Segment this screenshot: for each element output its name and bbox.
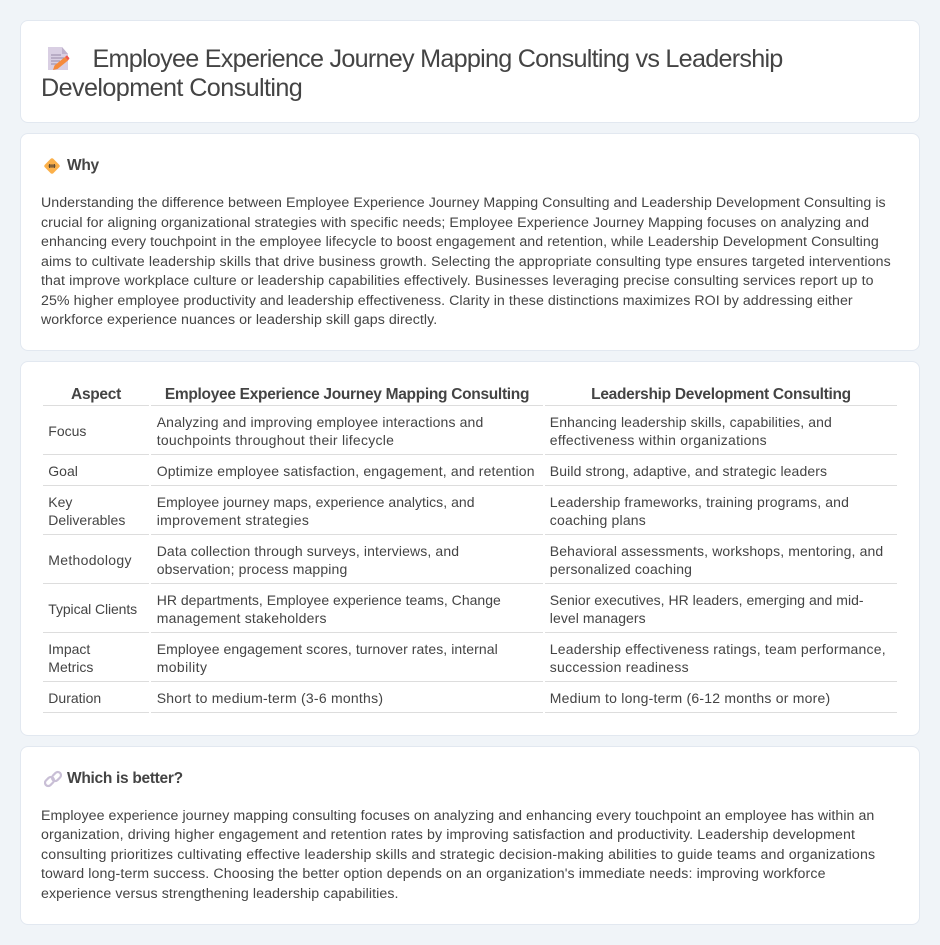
table: aspect comparison: Employee Experience Journey Mapping Consulting xyxy=(165,386,529,402)
icon: link xyxy=(44,770,62,788)
text block: why explanation: enhancing every touchpoint in the employee lifecycle to boost engagement and retention, while Leadership Development Consulting xyxy=(41,234,879,250)
text block: why explanation: crucial for aligning organizational strategies with specific needs; Employee Experience Journey Mapping focuses on analyzing and xyxy=(41,214,869,230)
table: aspect comparison: Leadership effectiveness ratings, team performance, xyxy=(550,640,886,656)
table: aspect comparison: Leadership Development Consulting xyxy=(591,386,851,402)
table: aspect comparison: personalized coaching xyxy=(550,560,692,576)
table: aspect comparison: management stakeholders xyxy=(157,610,327,626)
table: aspect comparison: Methodology xyxy=(48,552,132,568)
table: aspect comparison: mobility xyxy=(157,658,207,674)
table: aspect comparison: succession readiness xyxy=(550,658,689,674)
panel: comparison table xyxy=(20,361,920,736)
table: aspect comparison: Aspect xyxy=(71,386,121,402)
table: aspect comparison: Employee journey maps, experience analytics, and xyxy=(157,494,475,510)
text block: why explanation: workforce experience nuances or leadership skill gaps directly. xyxy=(41,312,437,328)
table: aspect comparison: Employee engagement scores, turnover rates, internal xyxy=(157,640,498,656)
table: aspect comparison: coaching plans xyxy=(550,512,646,528)
text block: why explanation xyxy=(41,195,891,328)
table: aspect comparison: touchpoints throughout their lifecycle xyxy=(157,432,394,448)
heading: which is better: Which is better? xyxy=(67,770,183,787)
table: aspect comparison: Build strong, adaptive, and strategic leaders xyxy=(550,462,827,478)
text block: why explanation: Understanding the difference between Employee Experience Journey Mapping Consulting and Leadership Development Consulting is xyxy=(41,195,886,211)
panel: why xyxy=(20,133,920,351)
text block: why explanation: aims to cultivate leadership skills that drive business growth. Selecting the appropriate consulting type ensures targeted interventions xyxy=(41,254,891,270)
table: aspect comparison: Leadership frameworks, training programs, and xyxy=(550,494,849,510)
table: aspect comparison: Short to medium-term (3-6 months) xyxy=(157,690,383,706)
table: aspect comparison: improvement strategies xyxy=(157,512,309,528)
text block: verdict xyxy=(41,808,875,902)
panel: which is better xyxy=(20,746,920,925)
text block: why explanation: 25% higher employee productivity and leadership effectiveness. Clarity in these distinctions maximizes ROI by addressing either xyxy=(41,292,853,308)
table: aspect comparison: Data collection through surveys, interviews, and xyxy=(157,542,459,558)
table: aspect comparison: HR departments, Employee experience teams, Change xyxy=(157,592,501,608)
table: aspect comparison: Enhancing leadership skills, capabilities, and xyxy=(550,414,832,430)
text block: verdict: Employee experience journey mapping consulting focuses on analyzing and enhancing every touchpoint an employee has within an xyxy=(41,808,874,824)
heading: page title: Employee Experience Journey Mapping Consulting vs Leadership xyxy=(92,45,783,73)
text block: verdict: organization, driving higher engagement and retention rates by improving satisfaction and productivity. Leadership development xyxy=(41,827,855,843)
table: aspect comparison: Behavioral assessments, workshops, mentoring, and xyxy=(550,542,883,558)
table: aspect comparison: Deliverables xyxy=(48,512,125,528)
panel: title xyxy=(20,20,920,123)
text block: verdict: experience versus strengthening leadership capabilities. xyxy=(41,886,399,902)
table: aspect comparison: Typical Clients xyxy=(48,600,137,616)
heading: page title xyxy=(41,45,783,102)
table: aspect comparison xyxy=(43,386,897,713)
table: aspect comparison: Medium to long-term (6-12 months or more) xyxy=(550,690,830,706)
table: aspect comparison: effectiveness within organizations xyxy=(550,432,767,448)
table: aspect comparison: Optimize employee satisfaction, engagement, and retention xyxy=(157,462,535,478)
table: aspect comparison: level managers xyxy=(550,610,646,626)
text block: verdict: consulting prioritizes cultivating effective leadership skills and strategic decision-making abilities to guide teams and organizations xyxy=(41,846,875,862)
table: aspect comparison: observation; process mapping xyxy=(157,560,347,576)
icon: document with pencil xyxy=(48,47,70,70)
text block: why explanation: that improve workplace culture or leadership capabilities effectively. Businesses leveraging precise consulting services report up to xyxy=(41,273,874,289)
table: aspect comparison: Goal xyxy=(48,462,78,478)
table: aspect comparison: Senior executives, HR leaders, emerging and mid- xyxy=(550,592,864,608)
table: aspect comparison: Key xyxy=(48,494,72,510)
table: aspect comparison: Metrics xyxy=(48,658,93,674)
table: aspect comparison: Focus xyxy=(48,422,86,438)
text block: verdict: toward long-term success. Choosing the better option depends on an organization's immediate needs: improving workforce xyxy=(41,866,826,882)
table: aspect comparison: Impact xyxy=(48,640,90,656)
heading: page title: Development Consulting xyxy=(41,74,302,102)
icon: diamond warning sign xyxy=(44,158,60,174)
table: aspect comparison: Duration xyxy=(48,690,101,706)
table: aspect comparison: Analyzing and improving employee interactions and xyxy=(157,414,483,430)
heading: why: Why xyxy=(67,157,99,174)
